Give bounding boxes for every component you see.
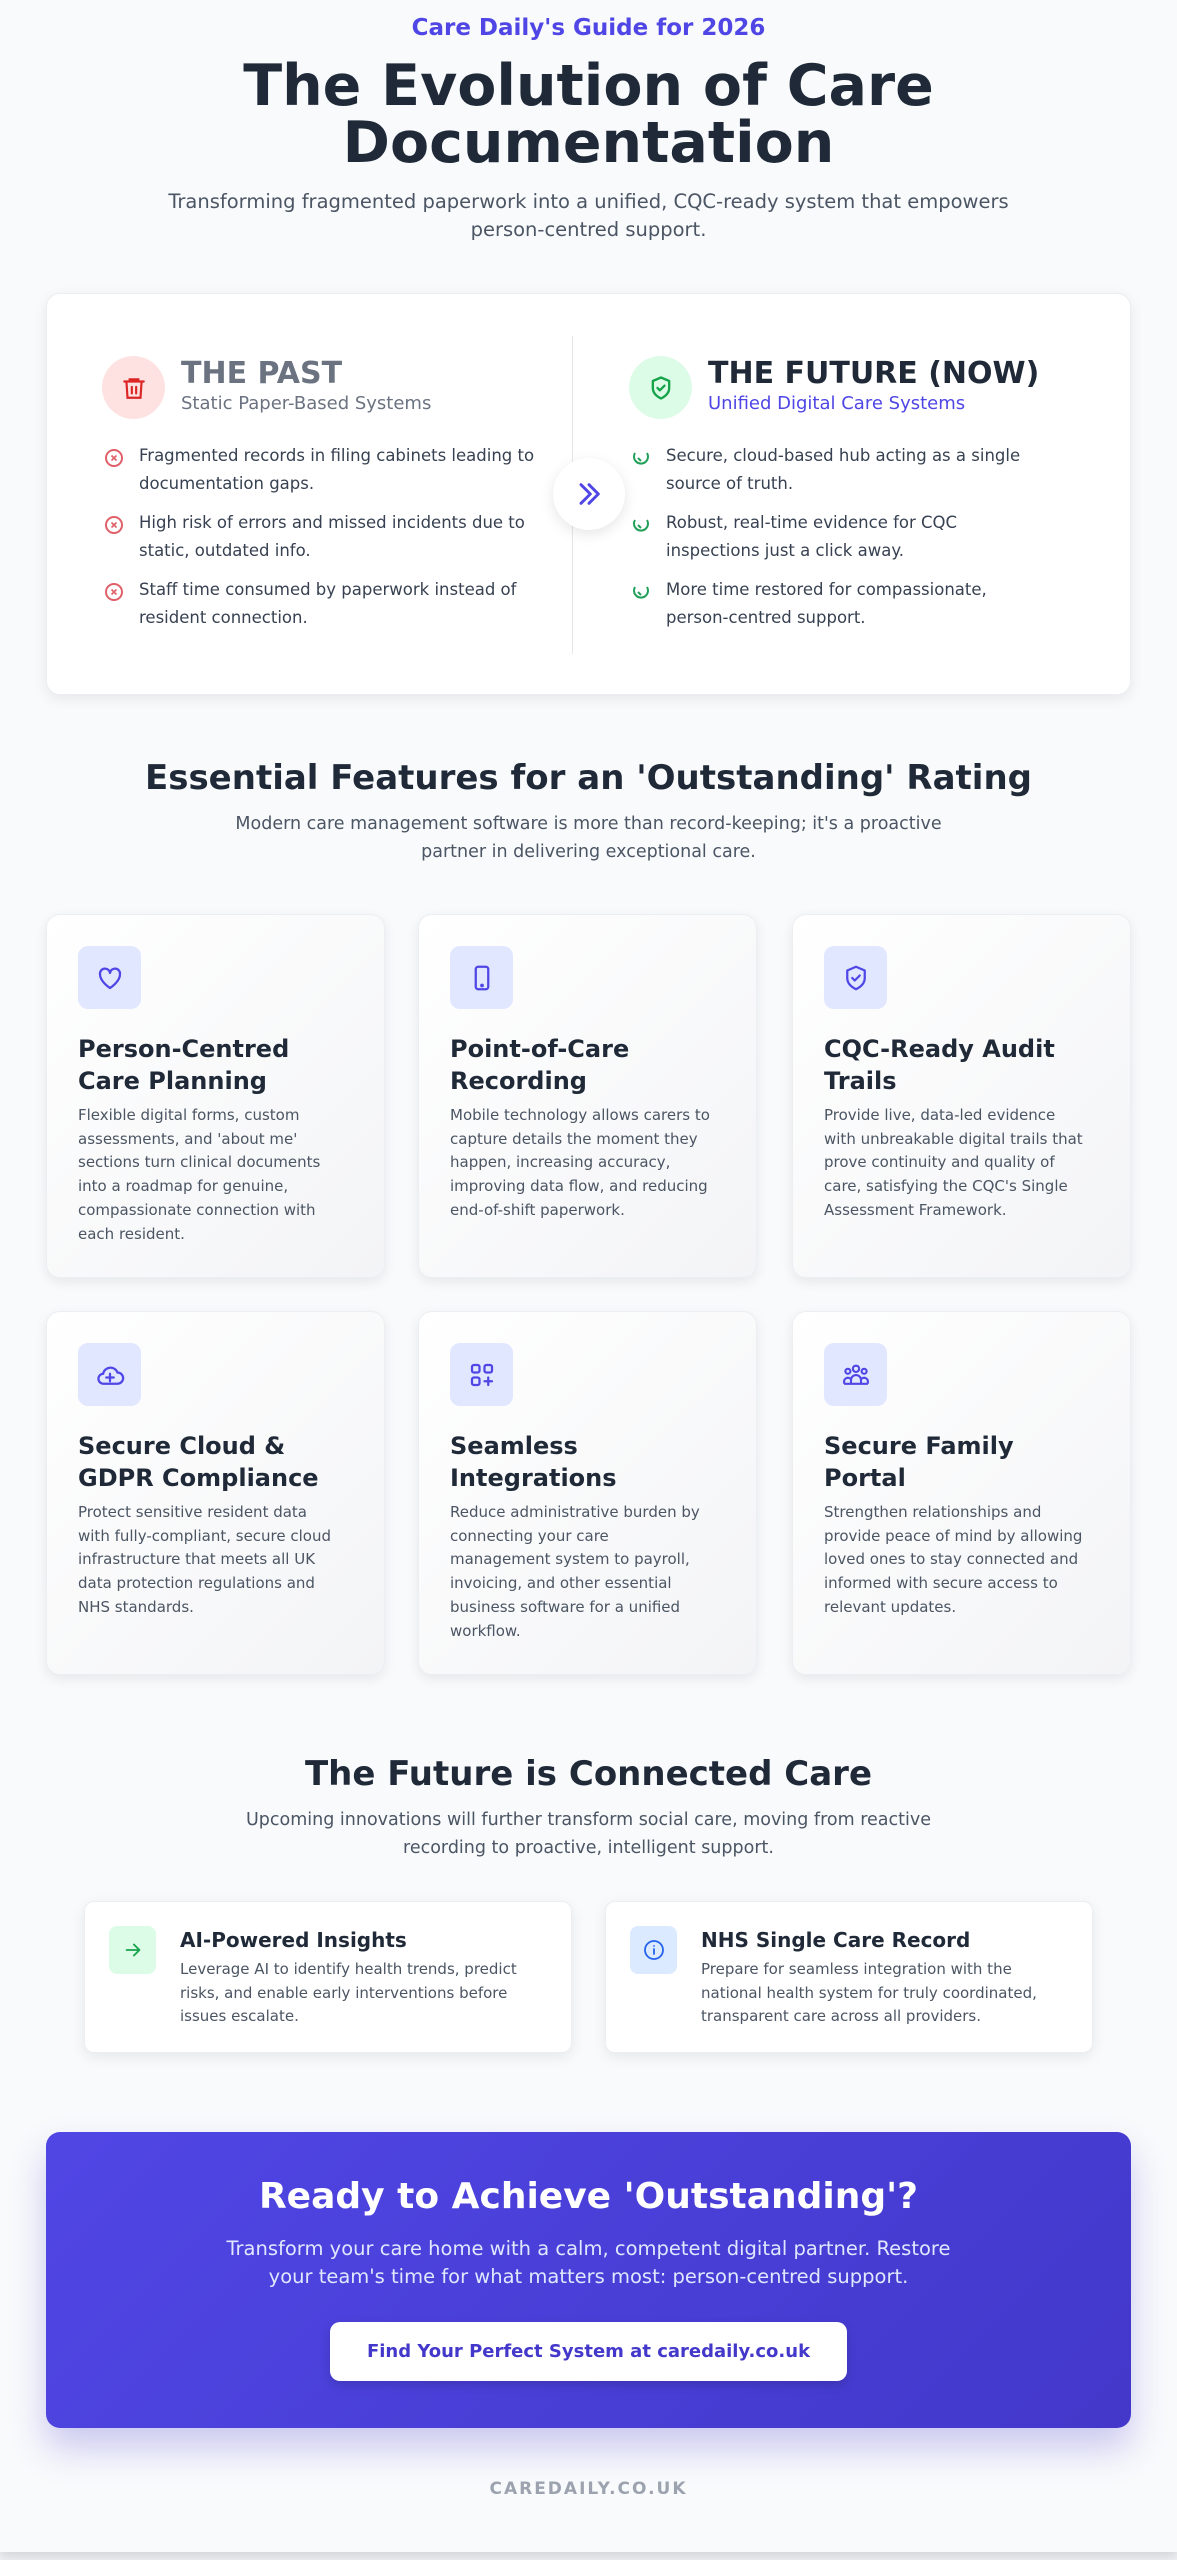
card: ai insights <box>84 1901 572 2053</box>
card: audit trails: prove continuity and quality of <box>824 1153 1055 1171</box>
heading: essential features: Essential Features for an 'Outstanding' Rating <box>145 758 1032 798</box>
icon: apps <box>450 1343 513 1406</box>
card: audit trails: Provide live, data-led evidence <box>824 1106 1055 1124</box>
list: past problems: Fragmented records in filing cabinets leading to documentation gaps. <box>139 446 534 493</box>
card: integrations: Reduce administrative burden by <box>450 1503 700 1521</box>
card: family portal: Secure Family Portal <box>824 1432 1014 1492</box>
card: audit trails: care, satisfying the CQC's Single <box>824 1177 1068 1195</box>
card: point-of-care: capture details the moment they <box>450 1130 698 1148</box>
card: cloud gdpr: NHS standards. <box>78 1598 194 1616</box>
card: person-centred <box>46 914 385 1278</box>
card: integrations: business software for a unified <box>450 1598 680 1616</box>
card: cloud gdpr: infrastructure that meets all UK <box>78 1550 315 1568</box>
icon: trash <box>102 356 165 419</box>
list: past problems: Staff time consumed by paperwork instead of resident connection. <box>139 580 516 627</box>
icon: cloud <box>78 1343 141 1406</box>
card: family portal <box>792 1311 1131 1675</box>
list: future benefits: Secure, cloud-based hub acting as a single <box>666 446 1020 465</box>
card: person-centred: sections turn clinical documents <box>78 1153 320 1171</box>
card: point-of-care: Point-of-Care Recording <box>450 1035 629 1095</box>
subtitle: Transforming fragmented paperwork into a unified, CQC-ready system that empowers <box>168 190 1009 213</box>
panel: call to action <box>46 2132 1131 2428</box>
list: future benefits: source of truth. <box>666 474 793 493</box>
panel: call to action: Ready to Achieve 'Outstanding'? <box>259 2176 918 2217</box>
card: cloud gdpr: Secure Cloud & GDPR Compliance <box>78 1432 319 1492</box>
eyebrow: Care Daily's Guide for 2026 <box>412 15 765 41</box>
card: audit trails <box>792 914 1131 1278</box>
list: future benefits: person-centred support. <box>666 608 866 627</box>
card: audit trails: CQC-Ready Audit Trails <box>824 1035 1055 1095</box>
card: integrations: invoicing, and other essential <box>450 1574 672 1592</box>
card: family portal: loved ones to stay connected and <box>824 1550 1078 1568</box>
icon: heart <box>78 946 141 1009</box>
card: point-of-care <box>418 914 757 1278</box>
icon: people <box>824 1343 887 1406</box>
icon: shield check <box>824 946 887 1009</box>
card: cloud gdpr: with fully-compliant, secure cloud <box>78 1527 331 1545</box>
title <box>243 53 934 176</box>
card: integrations: Seamless Integrations <box>450 1432 617 1492</box>
card: family portal: informed with secure access to <box>824 1574 1058 1592</box>
card: ai insights: Leverage AI to identify health trends, predict risks, and enable early interventions before issues escalate. <box>180 1960 517 2025</box>
icon: arrow circle <box>553 458 625 530</box>
card: person-centred: into a roadmap for genuine, <box>78 1177 288 1195</box>
list: future benefits: More time restored for compassionate, <box>666 580 987 599</box>
card: cloud gdpr: Protect sensitive resident data <box>78 1503 307 1521</box>
card: cloud gdpr: data protection regulations and <box>78 1574 315 1592</box>
heading: the past: THE PAST <box>181 356 342 391</box>
icon: phone <box>450 946 513 1009</box>
card: point-of-care: end-of-shift paperwork. <box>450 1201 625 1219</box>
list: future benefits: Robust, real-time evidence for CQC <box>666 513 957 532</box>
card: person-centred: Person-Centred Care Planning <box>78 1035 289 1095</box>
card: point-of-care: Mobile technology allows carers to <box>450 1106 710 1124</box>
heading: connected care: The Future is Connected Care <box>305 1754 872 1794</box>
list: future benefits: inspections just a click away. <box>666 541 904 560</box>
panel: call to action: Transform your care home with a calm, competent digital partner. Restore <box>226 2237 950 2260</box>
card: cloud gdpr <box>46 1311 385 1675</box>
card: person-centred: each resident. <box>78 1225 185 1243</box>
card: family portal: provide peace of mind by allowing <box>824 1527 1082 1545</box>
icon: shield <box>629 356 692 419</box>
subtitle <box>168 190 1009 241</box>
card: integrations <box>418 1311 757 1675</box>
card: integrations: management system to payroll, <box>450 1550 690 1568</box>
panel: past vs future: Static Paper-Based Systems <box>181 393 431 414</box>
card: person-centred: Flexible digital forms, custom <box>78 1106 299 1124</box>
list: future benefits <box>633 446 1020 627</box>
subtitle: person-centred support. <box>471 218 706 241</box>
button: Find Your Perfect System at caredaily.co.uk <box>367 2341 810 2362</box>
list: past problems <box>105 446 534 627</box>
card: nhs record: NHS Single Care Record <box>701 1928 970 1952</box>
footer: CAREDAILY.CO.UK <box>489 2479 688 2499</box>
button <box>330 2322 847 2381</box>
panel: past vs future: Unified Digital Care Systems <box>708 393 965 414</box>
card: person-centred: assessments, and 'about me' <box>78 1130 297 1148</box>
heading: the future: THE FUTURE (NOW) <box>708 356 1039 391</box>
card: nhs record <box>605 1901 1093 2053</box>
card: integrations: connecting your care <box>450 1527 609 1545</box>
card: family portal: relevant updates. <box>824 1598 956 1616</box>
card: point-of-care: happen, increasing accuracy, <box>450 1153 670 1171</box>
card: nhs record: Prepare for seamless integration with the national health system for truly coordinated, transparent care across all providers. <box>701 1960 1037 2025</box>
icon: info <box>630 1926 677 1974</box>
text: features intro: Modern care management software is more than record-keeping; it's a proactive partner in delivering exceptional care. <box>235 814 942 862</box>
card: audit trails: Assessment Framework. <box>824 1201 1007 1219</box>
card: family portal: Strengthen relationships and <box>824 1503 1041 1521</box>
title: Documentation <box>343 110 834 176</box>
card: ai insights: AI-Powered Insights <box>180 1928 407 1952</box>
card: person-centred: compassionate connection with <box>78 1201 316 1219</box>
text: connected intro: Upcoming innovations will further transform social care, moving from reactive recording to proactive, intelligent support. <box>246 1810 931 1858</box>
icon: arrow <box>109 1926 156 1974</box>
title: The Evolution of Care <box>243 53 934 119</box>
list: past problems: High risk of errors and missed incidents due to static, outdated info. <box>139 513 525 560</box>
card: integrations: workflow. <box>450 1622 521 1640</box>
card: point-of-care: improving data flow, and reducing <box>450 1177 708 1195</box>
panel: call to action: your team's time for what matters most: person-centred support. <box>269 2265 908 2288</box>
card: audit trails: with unbreakable digital trails that <box>824 1130 1083 1148</box>
panel: past vs future <box>46 293 1131 695</box>
